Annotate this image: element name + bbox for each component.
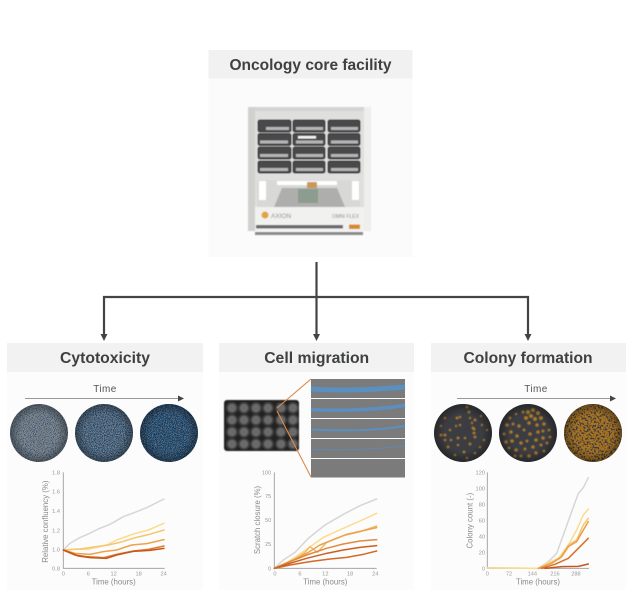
- icon: imaging instrument: OMNI FLEX: [332, 214, 360, 220]
- line chart: colony count: 80: [479, 502, 485, 508]
- line chart: colony count: 100: [476, 486, 485, 492]
- line chart: colony count: 144: [528, 571, 537, 577]
- line chart: relative confluency: Time (hours): [92, 577, 136, 586]
- label: time: Time: [524, 384, 548, 395]
- arrow: time: [457, 396, 616, 402]
- heading: cell migration: Cell migration: [264, 350, 369, 367]
- line chart: colony count: 120: [476, 470, 485, 476]
- line chart: relative confluency: 1.8: [52, 470, 60, 476]
- line chart: colony count: Time (hours): [516, 577, 560, 586]
- arrow: connectors from facility to assays: [100, 262, 532, 341]
- line chart: colony count: 216: [550, 571, 560, 577]
- line chart: relative confluency: 0: [62, 571, 65, 577]
- line chart: relative confluency: 1.6: [52, 490, 60, 496]
- line chart: relative confluency: Relative confluency (%): [41, 480, 50, 563]
- line chart: scratch closure: 75: [265, 494, 271, 500]
- line chart: colony count: 72: [506, 571, 512, 577]
- line chart: scratch closure: 24: [372, 571, 378, 577]
- image: scratch closure time series: [311, 379, 405, 478]
- line chart: scratch closure: 0: [273, 571, 277, 577]
- line chart: relative confluency: [41, 470, 167, 586]
- panel: oncology core facility: [208, 50, 412, 257]
- line chart: scratch closure: Time (hours): [303, 577, 348, 586]
- line chart: colony count: Colony count (-): [465, 492, 474, 549]
- line chart: scratch closure: Scratch closure (%): [253, 485, 262, 554]
- line chart: scratch closure: 0: [268, 566, 271, 572]
- icon: imaging instrument: AXION: [271, 213, 292, 220]
- line chart: relative confluency: 12: [111, 571, 117, 577]
- callout lines: zoom from well to strips: [277, 379, 311, 477]
- line chart: relative confluency: 1.0: [52, 548, 60, 554]
- line chart: relative confluency: 6: [87, 571, 90, 577]
- panel: colony formation: [431, 343, 626, 590]
- line chart: relative confluency: 0.8: [52, 566, 60, 572]
- line chart: colony count: 288: [571, 571, 581, 577]
- line chart: colony count: 0: [486, 571, 489, 577]
- label: time: Time: [93, 384, 117, 395]
- line chart: scratch closure: 50: [265, 518, 271, 524]
- line chart: relative confluency: 24: [161, 571, 167, 577]
- line chart: scratch closure: [253, 470, 378, 586]
- icon: imaging instrument: [248, 107, 371, 235]
- line chart: scratch closure: 6: [298, 571, 302, 577]
- well images: colony formation time series: [434, 404, 622, 462]
- line chart: relative confluency: 1.4: [52, 509, 60, 515]
- heading: cytotoxicity: Cytotoxicity: [60, 350, 150, 367]
- line chart: scratch closure: 18: [347, 571, 353, 577]
- line chart: relative confluency: 18: [136, 571, 142, 577]
- well images: cytotoxicity time series: [10, 404, 198, 462]
- line chart: colony count: 40: [479, 534, 485, 540]
- panel: cytotoxicity: [7, 343, 203, 590]
- heading: oncology core facility: Oncology core facility: [230, 57, 392, 74]
- line chart: colony count: 20: [479, 550, 485, 556]
- panel: cell migration: [219, 343, 414, 590]
- heading: colony formation: Colony formation: [464, 350, 592, 367]
- line chart: scratch closure: 25: [265, 542, 271, 548]
- line chart: relative confluency: 1.2: [52, 528, 60, 534]
- line chart: scratch closure: 12: [322, 571, 328, 577]
- line chart: colony count: 60: [479, 518, 485, 524]
- line chart: colony count: 0: [482, 566, 485, 572]
- arrow: time: [25, 396, 184, 402]
- line chart: colony count: [465, 470, 589, 586]
- image: 24-well plate: [224, 400, 299, 451]
- line chart: scratch closure: 100: [262, 470, 271, 476]
